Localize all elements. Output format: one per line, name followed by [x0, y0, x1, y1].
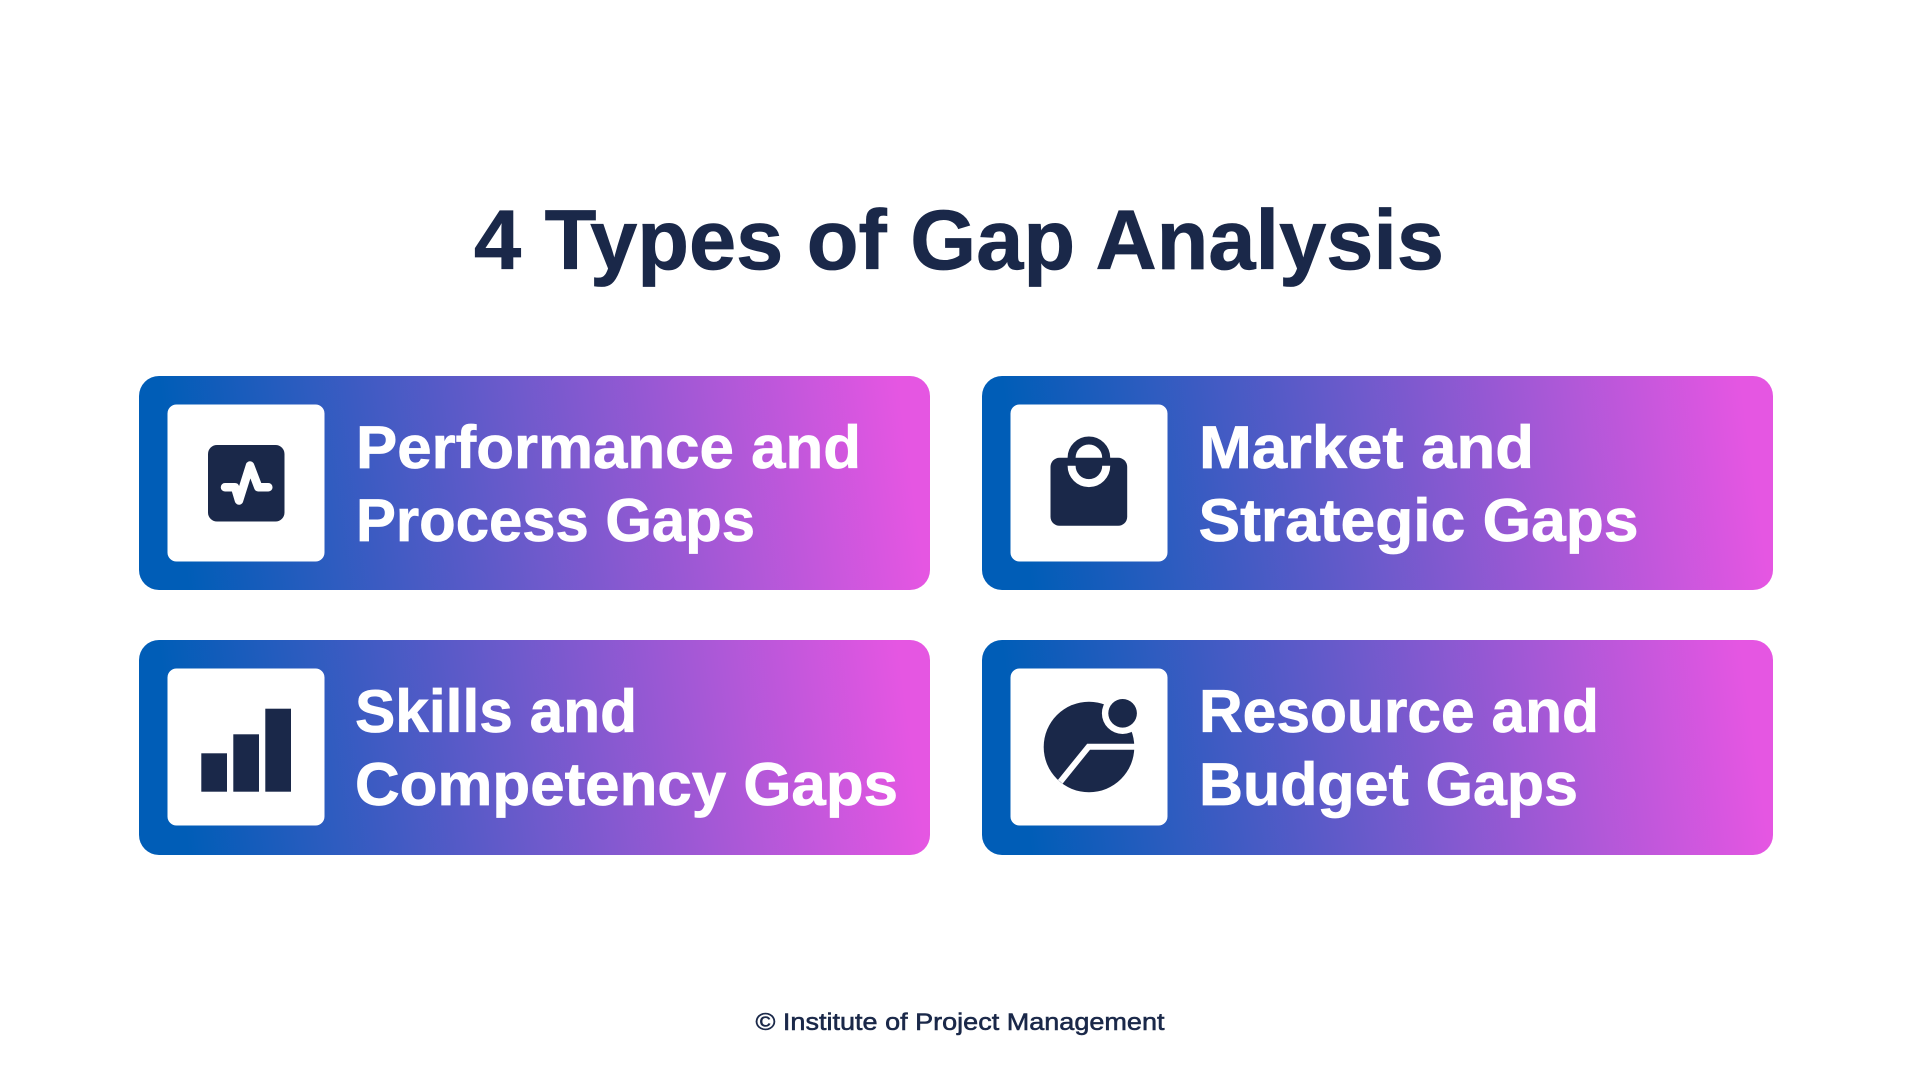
- card heading: Performance and: [356, 414, 861, 480]
- panel: Performance and Process Gaps: [139, 376, 930, 590]
- icon: shopping bag: [1010, 404, 1167, 561]
- card heading: [1198, 678, 1598, 818]
- title: 4 Types of Gap Analysis: [474, 193, 1444, 287]
- card heading: Budget Gaps: [1198, 751, 1578, 818]
- panel: Resource and Budget Gaps: [982, 640, 1772, 854]
- card heading: Skills and: [355, 678, 637, 745]
- card heading: Market and: [1198, 414, 1534, 480]
- icon: pie chart: [1010, 668, 1167, 826]
- icon: bar chart: [168, 668, 324, 826]
- card heading: Competency Gaps: [355, 751, 898, 818]
- card heading: [355, 678, 898, 818]
- card heading: [1198, 414, 1638, 554]
- card heading: Strategic Gaps: [1198, 486, 1638, 554]
- icon: performance pulse: [168, 404, 324, 561]
- card heading: Resource and: [1198, 678, 1598, 745]
- footer copyright: © Institute of Project Management: [756, 1009, 1165, 1036]
- panel: Skills and Competency Gaps: [139, 640, 930, 854]
- card heading: [356, 414, 861, 554]
- card heading: Process Gaps: [356, 486, 755, 554]
- panel: Market and Strategic Gaps: [982, 376, 1772, 590]
